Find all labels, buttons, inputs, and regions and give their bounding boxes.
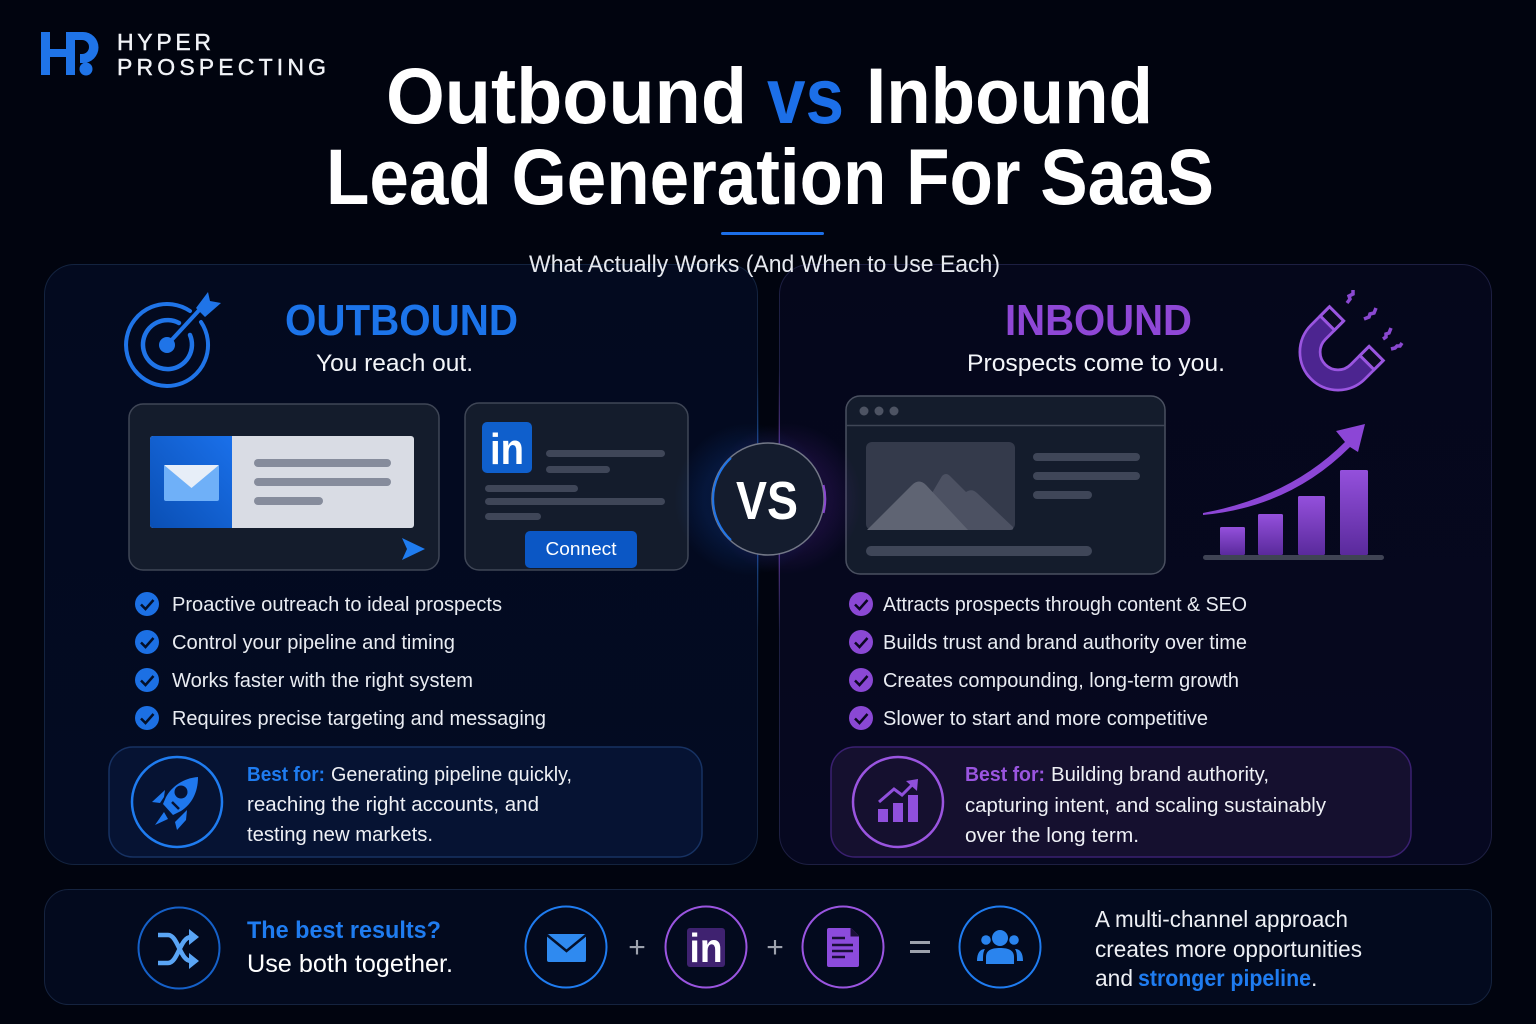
- inbound title: INBOUND: [1005, 296, 1192, 345]
- callout text: Best for:: [965, 764, 1045, 786]
- outbound title: OUTBOUND: [285, 296, 518, 345]
- icon: people: [960, 906, 1040, 988]
- multi-channel text: [1095, 906, 1362, 991]
- title: vs: [767, 51, 844, 140]
- multi-channel text: A multi-channel approach: [1095, 906, 1348, 932]
- icon: rocket: [132, 757, 222, 847]
- title: Outbound: [386, 51, 747, 140]
- best results text: The best results?: [247, 917, 441, 944]
- callout text: Building brand authority,: [1051, 764, 1269, 786]
- email message: [150, 436, 414, 528]
- best results text: Use both together.: [247, 950, 453, 978]
- connect button: [525, 531, 637, 568]
- logo: [41, 29, 326, 80]
- panel: inbound: [780, 264, 1492, 864]
- multi-channel text: creates more opportunities: [1095, 936, 1362, 962]
- linkedin card: [465, 403, 688, 570]
- title: Inbound: [866, 51, 1153, 140]
- icon: email channel: [526, 906, 606, 988]
- image placeholder: [866, 442, 1015, 530]
- equals: [910, 941, 930, 953]
- outbound checklist: [135, 592, 546, 730]
- check item: Builds trust and brand authority over time: [883, 632, 1247, 654]
- connect button: Connect: [546, 539, 616, 559]
- panel: best results bar: [44, 890, 1492, 1004]
- outbound heading: [126, 292, 518, 386]
- inbound tagline: Prospects come to you.: [967, 350, 1225, 377]
- check item: Proactive outreach to ideal prospects: [172, 594, 502, 616]
- logo wordmark: [117, 29, 326, 80]
- check item: Requires precise targeting and messaging: [172, 708, 546, 730]
- multi-channel text: and: [1095, 965, 1133, 991]
- icon: linkedin channel: [666, 906, 746, 988]
- icon: linkedin channel: in: [690, 925, 722, 971]
- outbound tagline: You reach out.: [316, 350, 473, 377]
- callout: outbound best for: [109, 747, 702, 857]
- check item: Slower to start and more competitive: [883, 708, 1208, 730]
- icon: send arrow: [402, 538, 425, 560]
- icon: magnet: [1291, 290, 1402, 399]
- multi-channel text: .: [1311, 965, 1317, 991]
- icon: linkedin logo: in: [490, 425, 524, 474]
- callout: inbound best for: [831, 747, 1411, 857]
- title: [326, 51, 1214, 221]
- check item: Control your pipeline and timing: [172, 632, 455, 654]
- icon: envelope: [164, 465, 219, 501]
- best results text: [247, 917, 453, 978]
- inbound heading: [967, 290, 1402, 399]
- logo wordmark: HYPER: [117, 29, 211, 55]
- arrow: growth: [1203, 424, 1365, 515]
- plus: +: [766, 931, 784, 964]
- browser window illustration: [846, 396, 1165, 574]
- growth bar chart: [1203, 424, 1384, 560]
- icon: target with arrow: [126, 292, 221, 386]
- check item: Works faster with the right system: [172, 670, 473, 692]
- logo wordmark: PROSPECTING: [117, 54, 326, 80]
- icon: document channel: [802, 906, 884, 988]
- inbound checklist: [849, 592, 1247, 730]
- callout text: testing new markets.: [247, 824, 433, 846]
- panel: outbound: [44, 264, 758, 864]
- multi-channel text: stronger pipeline: [1138, 965, 1311, 991]
- logo mark: [41, 32, 98, 76]
- callout text: Best for:: [247, 764, 325, 786]
- callout text: reaching the right accounts, and: [247, 794, 539, 816]
- vs badge: [674, 423, 862, 575]
- check item: Attracts prospects through content & SEO: [883, 594, 1247, 616]
- callout text: Generating pipeline quickly,: [331, 764, 572, 786]
- plus: +: [628, 931, 646, 964]
- email card: [129, 404, 439, 570]
- title underline: [721, 232, 824, 235]
- subtitle: What Actually Works (And When to Use Each): [529, 251, 1000, 278]
- callout text: capturing intent, and scaling sustainably: [965, 795, 1326, 817]
- vs badge: VS: [736, 471, 798, 531]
- callout text: over the long term.: [965, 825, 1139, 847]
- callout text: [965, 764, 1326, 847]
- icon: rising chart: [853, 757, 943, 847]
- check item: Creates compounding, long-term growth: [883, 670, 1239, 692]
- icon: shuffle: [138, 908, 220, 988]
- callout text: [247, 764, 572, 846]
- title: Lead Generation For SaaS: [326, 132, 1214, 221]
